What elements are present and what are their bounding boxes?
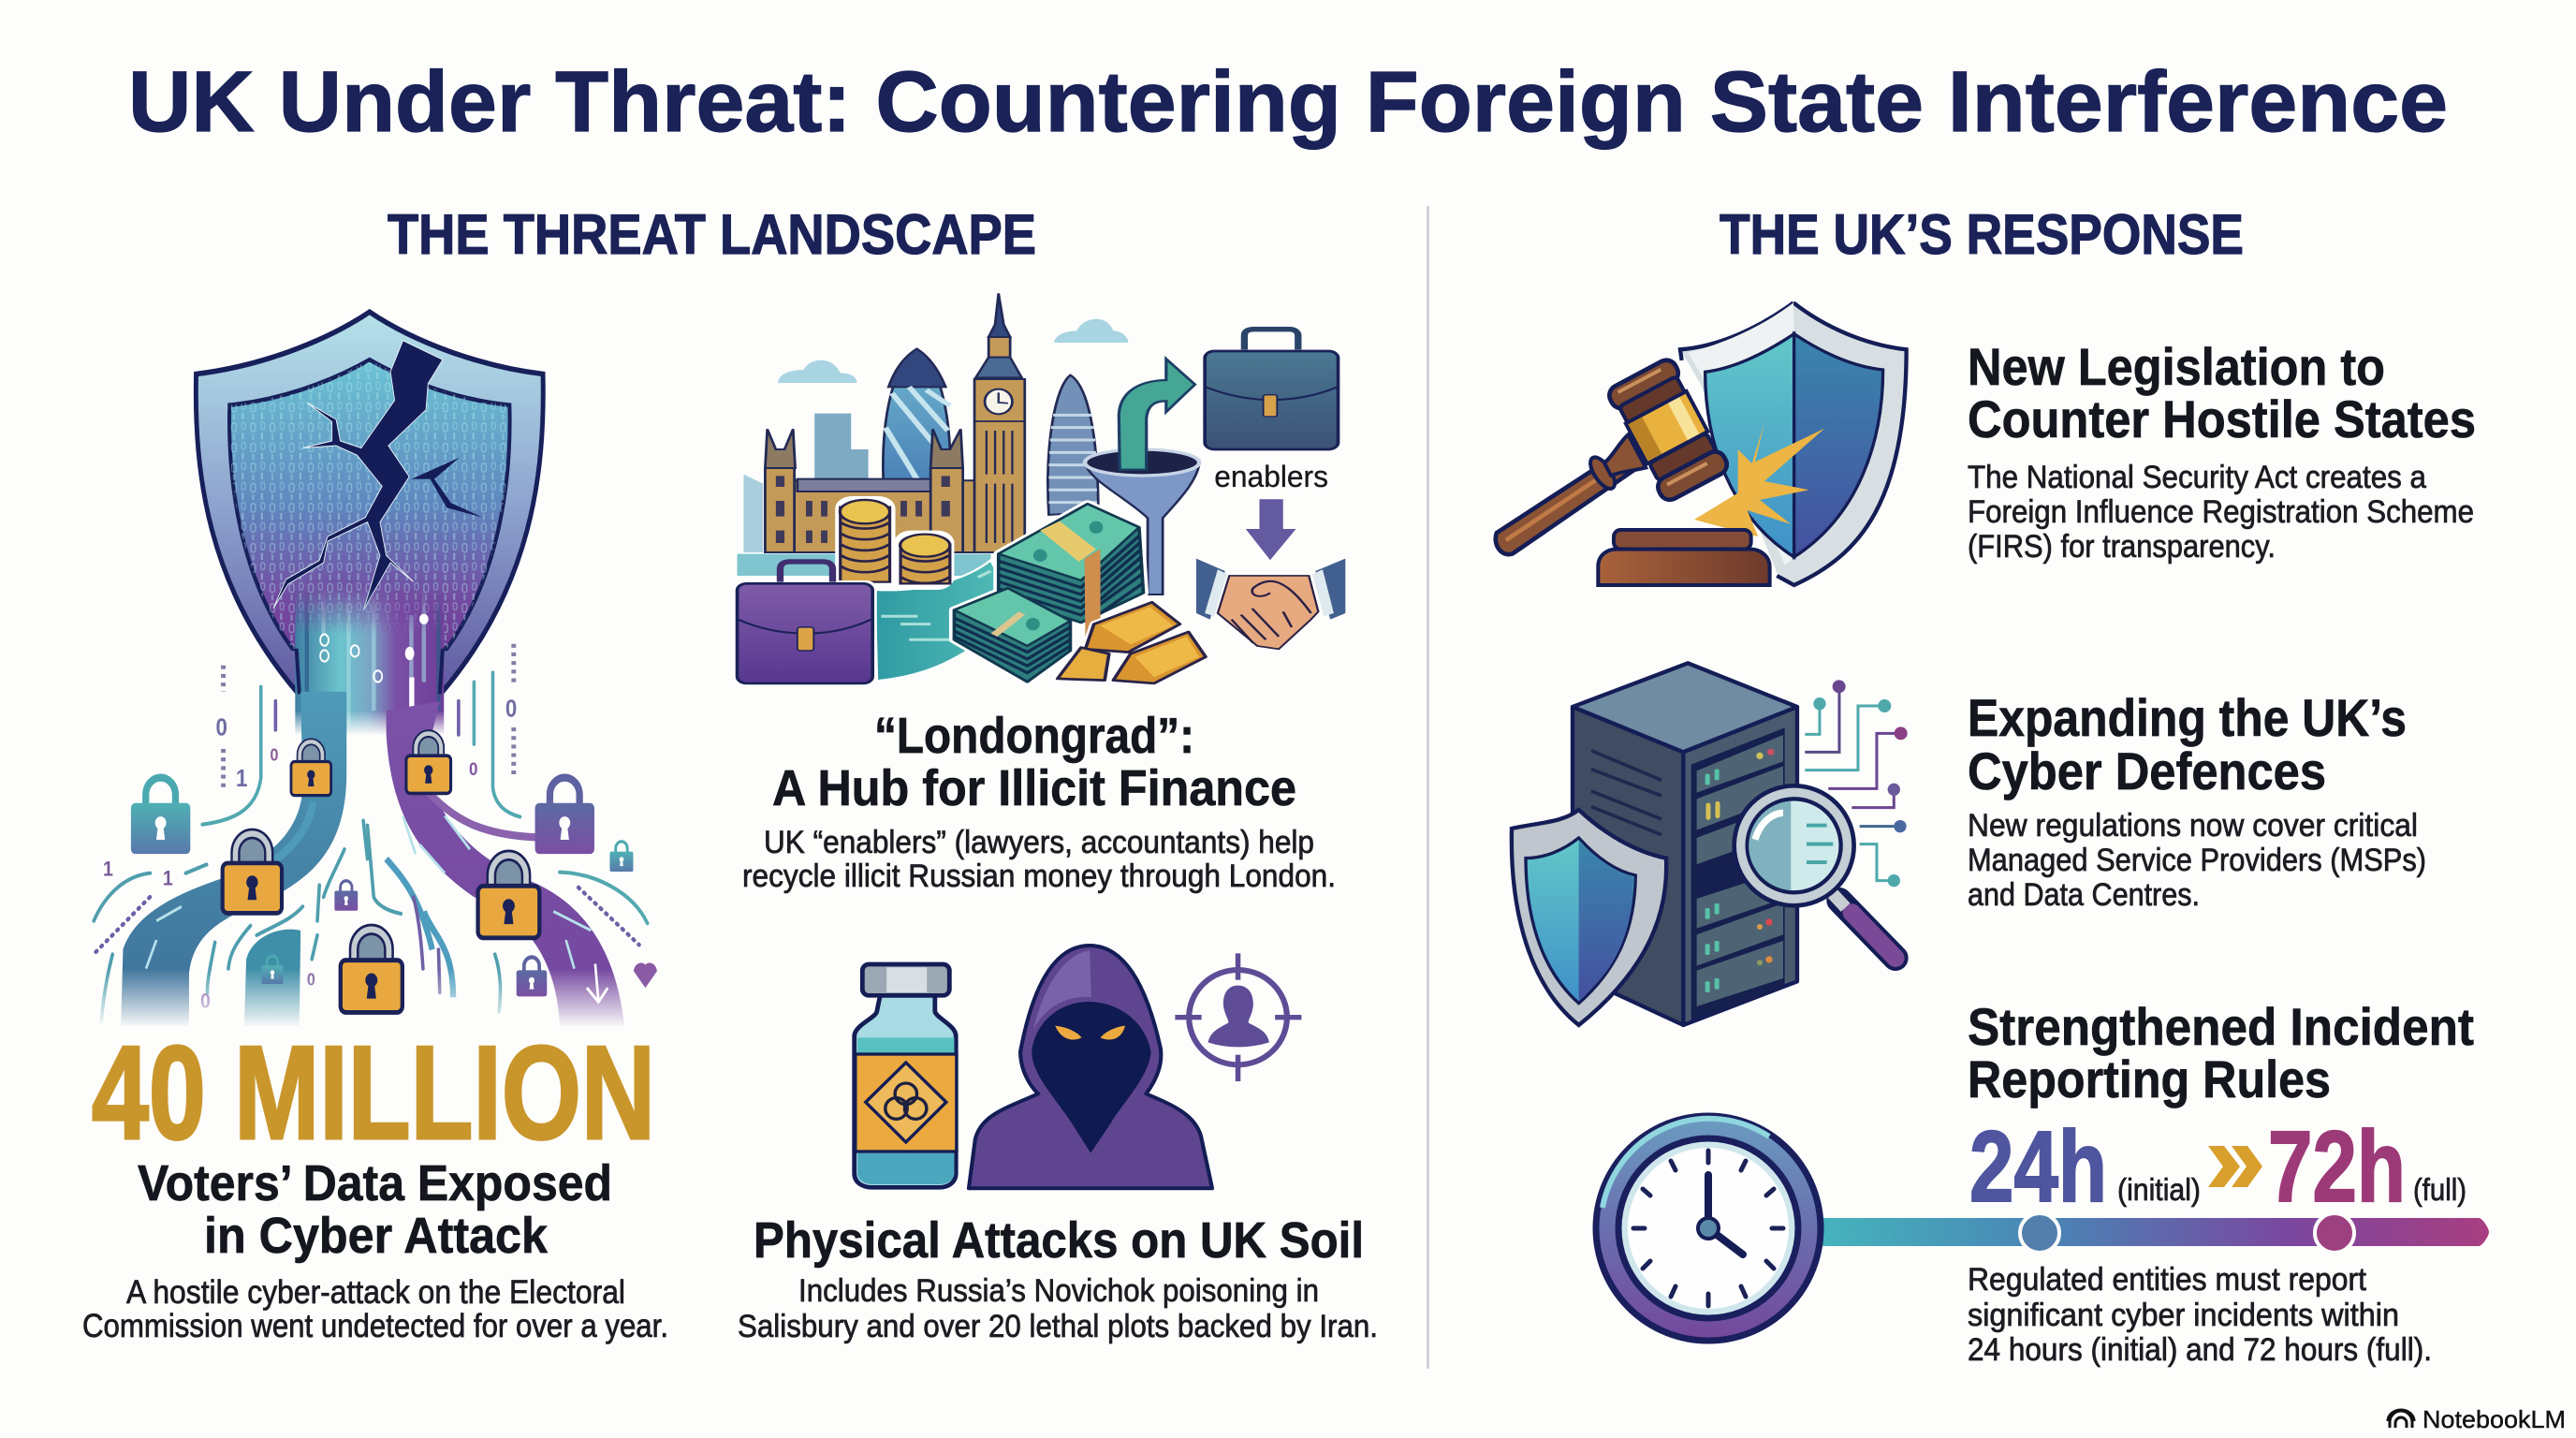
binary digits — [103, 696, 517, 1013]
text: regulated entities — [1968, 1262, 2432, 1368]
heading: londongrad: A Hub for Illicit Finance — [772, 760, 1296, 816]
binary digits: 1 — [163, 867, 173, 890]
binary digits: 1 — [103, 858, 113, 881]
funnel — [1085, 449, 1199, 594]
panel: threat landscape — [82, 293, 1378, 1344]
stat: 72h: 72h — [2268, 1109, 2406, 1223]
notebooklm watermark: NotebookLM — [2422, 1405, 2566, 1433]
label: enablers: enablers — [1214, 461, 1328, 493]
binary digits: 0 — [216, 714, 227, 741]
text: new regulations: New regulations now cover critical — [1968, 808, 2418, 844]
binary digits: 0 — [200, 990, 211, 1013]
text: regulated entities: 24 hours (initial) and 72 hours (full). — [1968, 1332, 2432, 1368]
heading: incident reporting: Strengthened Incident — [1968, 997, 2474, 1056]
timeline: 24h to 72h — [1821, 1109, 2489, 1253]
river band — [738, 554, 990, 576]
stat: 40 million: 40 MILLION — [92, 1019, 655, 1167]
heading: voters' data exposed: in Cyber Attack — [204, 1208, 549, 1264]
text: enablers description — [742, 825, 1336, 894]
data stream — [121, 567, 624, 1026]
icon: handshake — [1196, 559, 1345, 649]
stat: 24h: 24h — [1969, 1109, 2107, 1223]
icon: cracked shield with data streams and padlocks — [94, 312, 662, 1028]
label: full: (full) — [2413, 1172, 2466, 1207]
binary digits: 1 — [236, 765, 247, 792]
arrow: money out of funnel — [1119, 359, 1195, 470]
heading: voters' data exposed: Voters’ Data Exposed — [138, 1155, 612, 1211]
icon: poison vial, hooded figure, target — [855, 946, 1301, 1188]
text: new regulations: Managed Service Providers (MSPs) — [1968, 843, 2426, 878]
heading: new legislation — [1968, 337, 2476, 448]
icon: london skyline and illicit finance — [733, 293, 1345, 686]
text: physical attacks description — [738, 1273, 1378, 1344]
title: UK Under Threat: Countering Foreign State Interference — [128, 54, 2448, 150]
icon: server with shield and magnifier — [1512, 663, 1908, 1025]
london skyline — [743, 293, 1098, 552]
heading: the UK's response: THE UK’S RESPONSE — [1720, 203, 2244, 266]
text: electoral commission attack: A hostile cyber-attack on the Electoral — [126, 1274, 625, 1311]
heading: new legislation: New Legislation to — [1968, 337, 2385, 396]
binary digits: 0 — [469, 759, 477, 779]
arrow: enablers down to handshake — [1246, 499, 1296, 560]
padlocks — [131, 734, 657, 1012]
binary digits: 0 — [505, 696, 517, 723]
heading: new legislation: Counter Hostile States — [1968, 389, 2476, 448]
heading: cyber defences: Cyber Defences — [1968, 741, 2326, 800]
heading: londongrad: “Londongrad”: — [874, 708, 1194, 764]
text: enablers description: recycle illicit Russian money through London. — [742, 858, 1336, 894]
text: electoral commission attack: Commission went undetected for over a year. — [82, 1308, 668, 1344]
cracked shield — [196, 312, 543, 694]
heading: physical attacks: Physical Attacks on UK Soil — [754, 1212, 1364, 1269]
sound block — [1598, 530, 1770, 585]
connector strands — [94, 644, 648, 1021]
text: new regulations: and Data Centres. — [1968, 877, 2200, 913]
label: initial: (initial) — [2117, 1172, 2201, 1207]
text: regulated entities: Regulated entities must report — [1968, 1262, 2367, 1298]
text: physical attacks description: Salisbury and over 20 lethal plots backed by Iran. — [738, 1309, 1378, 1344]
server tower — [1573, 663, 1797, 1025]
shield — [1680, 302, 1907, 585]
heading: londongrad — [772, 708, 1296, 816]
text: national security act — [1968, 460, 2474, 565]
text: regulated entities: significant cyber incidents within — [1968, 1298, 2399, 1333]
heading: voters' data exposed — [138, 1155, 612, 1264]
icon: gold bars — [1058, 602, 1206, 683]
poison vial — [855, 964, 957, 1187]
clouds — [778, 319, 1128, 383]
text: electoral commission attack — [82, 1274, 668, 1344]
heading: cyber defences: Expanding the UK’s — [1968, 688, 2407, 747]
impact burst — [1694, 423, 1824, 536]
text: national security act: The National Security Act creates a — [1968, 460, 2426, 495]
heading: incident reporting — [1968, 997, 2474, 1108]
icon: gavel and shield — [1456, 302, 1907, 585]
magnifying glass — [1734, 785, 1895, 958]
text: new regulations — [1968, 808, 2426, 913]
heading: incident reporting: Reporting Rules — [1968, 1049, 2331, 1108]
icon: target crosshair — [1175, 953, 1301, 1081]
icon: purple briefcase — [733, 562, 877, 686]
timeline bar — [1821, 1213, 2489, 1253]
text: enablers description: UK “enablers” (lawyers, accountants) help — [764, 825, 1314, 860]
text: physical attacks description: Includes Russia’s Novichok poisoning in — [798, 1273, 1319, 1309]
binary digits: 0 — [271, 745, 278, 765]
icon: clock — [1596, 1116, 1821, 1341]
binary digits: 0 — [307, 970, 315, 990]
icon: navy briefcase — [1205, 330, 1339, 449]
heading: the threat landscape: THE THREAT LANDSCAPE — [388, 203, 1036, 266]
shield — [1512, 810, 1666, 1025]
text: national security act: Foreign Influence Registration Scheme — [1968, 494, 2474, 530]
coin stacks — [835, 496, 954, 590]
icon: cash stacks — [954, 504, 1143, 682]
heading: cyber defences — [1968, 688, 2407, 800]
hooded figure — [969, 946, 1212, 1188]
text: national security act: (FIRS) for transparency. — [1968, 529, 2276, 565]
gavel — [1456, 357, 1731, 582]
icon: chevrons — [2208, 1146, 2262, 1187]
panel: UK's response — [1456, 302, 2489, 1368]
circuit lines — [1805, 680, 1908, 887]
